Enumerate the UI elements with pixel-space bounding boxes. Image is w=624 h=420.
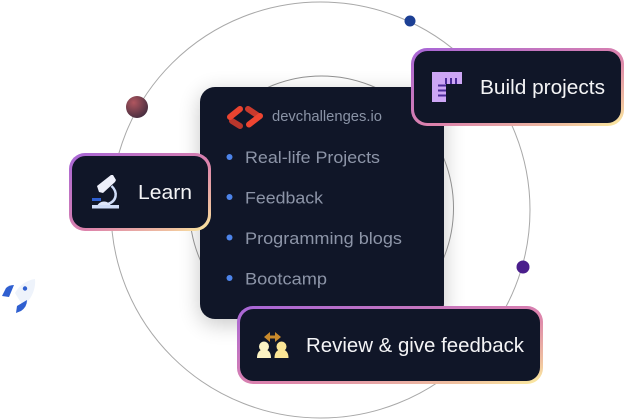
- badge: Learn: [69, 153, 211, 231]
- inner orbit: [190, 76, 454, 340]
- planet: purple: [516, 260, 530, 274]
- label: Review & give feedback: [306, 335, 525, 357]
- list item: Feedback: Feedback: [245, 188, 324, 208]
- card shadow: [200, 92, 444, 324]
- badge: Review & give feedback: [237, 306, 543, 384]
- badge: Build projects: [411, 48, 624, 126]
- icon: rocket: [2, 279, 35, 313]
- label: Learn: [138, 182, 192, 204]
- brand name: devchallenges.io: [272, 108, 382, 125]
- icon: microscope: [92, 175, 119, 208]
- list item: Real-life Projects: Real-life Projects: [245, 148, 380, 167]
- planet: blue: [404, 16, 416, 26]
- icon: people exchanging: [257, 332, 288, 358]
- outer orbit: [111, 2, 530, 418]
- label: Build projects: [480, 77, 605, 99]
- icon: ruler: [432, 72, 462, 102]
- logo: [230, 109, 260, 126]
- planet: maroon: [126, 96, 148, 118]
- panel: devchallenges card: [200, 87, 444, 319]
- list item: Programming blogs: Programming blogs: [245, 229, 402, 248]
- list item: Bootcamp: Bootcamp: [245, 270, 327, 288]
